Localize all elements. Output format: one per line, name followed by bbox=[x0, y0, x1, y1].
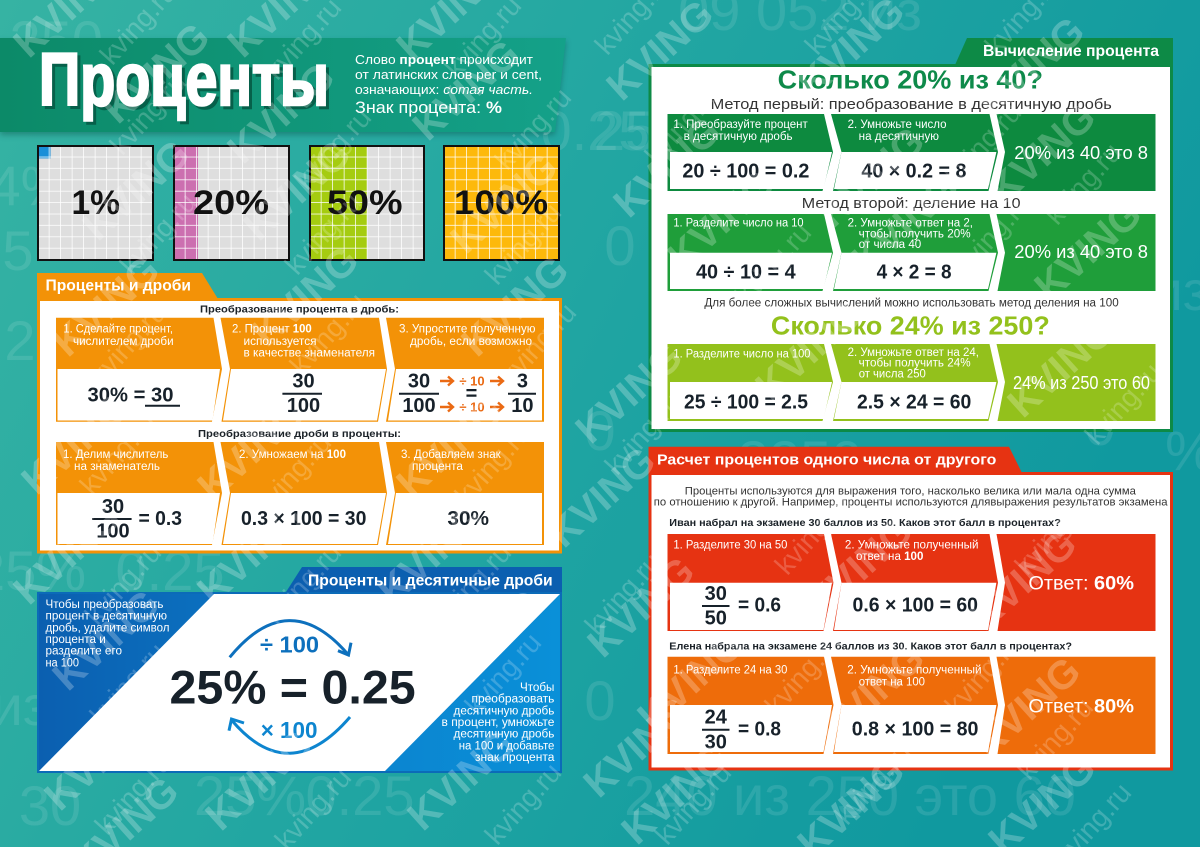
watermark: KVING bbox=[14, 386, 137, 503]
intro text: Проценты используются для выражения того, насколько велика или мала одна сумма bbox=[685, 485, 1137, 497]
problem 1: Иван набрал на экзамене 30 баллов из 50. Каков этот балл в процентах? bbox=[669, 517, 1061, 529]
panel: percent of one number from another bbox=[648, 447, 1172, 769]
step row 1: дробь, если возможно bbox=[410, 336, 532, 348]
problem 2 steps: ответ на 100 bbox=[859, 676, 925, 688]
background numbers: 0.25 bbox=[116, 539, 224, 602]
intro text: по отношению к другой. Например, проценты используются длявыражения результатов экзамена bbox=[654, 496, 1168, 508]
watermark: kving.ru bbox=[459, 627, 547, 720]
intro text bbox=[654, 485, 1168, 508]
question 2 steps: 25 ÷ 100 = 2.5 bbox=[684, 391, 808, 413]
watermark: KVING bbox=[400, 722, 523, 839]
watermark: KVING bbox=[1027, 192, 1150, 309]
step row 1: 30 bbox=[408, 370, 430, 392]
watermark: KVING bbox=[198, 722, 321, 839]
question 2: Сколько 24% из 250? bbox=[771, 310, 1050, 340]
panel: percent and fractions bbox=[37, 273, 560, 552]
intro text bbox=[355, 53, 542, 117]
question 2 steps: чтобы получить 24% bbox=[859, 358, 971, 370]
problem 1 steps: Ответ: 60% bbox=[1028, 573, 1134, 594]
step row 2: на знаменатель bbox=[74, 461, 160, 473]
main equation: 25% = 0.25 bbox=[170, 660, 416, 713]
left explanation: Чтобы преобразовать bbox=[46, 599, 164, 611]
watermark: KVING bbox=[45, 582, 168, 699]
right explanation: в процент, умножьте bbox=[442, 717, 554, 729]
problem 1 steps: = 0.6 bbox=[738, 595, 781, 617]
problem 1 steps: 30 bbox=[705, 583, 727, 605]
right explanation: знак процента bbox=[475, 752, 555, 764]
grid: 100% bbox=[444, 146, 559, 260]
watermark: KVING bbox=[748, 292, 871, 409]
watermark: KVING bbox=[966, 649, 1089, 766]
grid: 1%: 1% bbox=[72, 184, 120, 222]
problem 2 steps: 0.8 × 100 = 80 bbox=[852, 719, 978, 741]
method 1 steps: 40 × 0.2 = 8 bbox=[861, 160, 966, 182]
problem 1 steps: 50 bbox=[705, 607, 727, 629]
subheading: Преобразование процента в дробь: bbox=[200, 304, 399, 316]
background numbers: 0 bbox=[584, 399, 616, 462]
step row 1: 30 bbox=[292, 370, 315, 392]
watermark: KVING bbox=[798, 509, 921, 626]
question 2 steps: 24% из 250 это 60 bbox=[1013, 373, 1150, 393]
step row 1: 2. Процент 100 bbox=[232, 324, 312, 336]
watermark: KVING bbox=[606, 109, 729, 226]
left explanation: на 100 bbox=[46, 657, 79, 669]
watermark: KVING bbox=[95, 15, 218, 132]
question 2 steps: 2. Умножьте ответ на 24, bbox=[848, 347, 979, 359]
step row 1: в качестве знаменателя bbox=[244, 347, 375, 359]
watermark: kving.ru bbox=[939, 97, 1027, 190]
step row 1: 100 bbox=[287, 395, 320, 417]
background numbers: 0 bbox=[1084, 394, 1116, 457]
watermark: KVING bbox=[220, 55, 343, 172]
arrow: divide by 100: ÷ 100 bbox=[260, 632, 319, 658]
watermark: KVING bbox=[45, 248, 168, 365]
watermark: KVING bbox=[970, 9, 1093, 126]
watermark: kving.ru bbox=[769, 487, 857, 580]
watermark: KVING bbox=[810, 119, 933, 236]
watermark: KVING bbox=[37, 702, 160, 819]
title band bbox=[0, 38, 566, 132]
left explanation: процента и bbox=[46, 634, 106, 646]
watermark: KVING bbox=[962, 522, 1085, 639]
step row 1: 1. Сделайте процент, bbox=[63, 324, 173, 336]
watermark: kving.ru bbox=[279, 187, 367, 280]
method 1 steps: на десятичную bbox=[859, 131, 939, 143]
step row 2: 100 bbox=[96, 521, 130, 543]
method 2 steps: 1. Разделите число на 10 bbox=[673, 218, 804, 230]
step row 2: 30 bbox=[102, 496, 124, 518]
watermark: kving.ru bbox=[949, 187, 1037, 280]
step row 2: 2. Умножаем на 100 bbox=[239, 449, 346, 461]
background numbers: 240 из 250 это 60 bbox=[624, 764, 1076, 827]
watermark: kving.ru bbox=[429, 537, 517, 630]
problem 2 steps: = 0.8 bbox=[738, 719, 781, 741]
method 2 steps: 4 × 2 = 8 bbox=[877, 261, 952, 283]
step row 1 bbox=[56, 318, 544, 422]
watermark: kving.ru bbox=[1011, 692, 1099, 785]
arrow: divide by 100 bbox=[230, 621, 351, 658]
problem 2 steps: 30 bbox=[705, 731, 727, 753]
method 2 steps bbox=[668, 214, 1156, 291]
watermark: kving.ru bbox=[84, 297, 172, 390]
watermark: kving.ru bbox=[1009, 487, 1097, 580]
panel heading: Проценты и десятичные дроби bbox=[308, 573, 553, 590]
panel: calculating a percentage bbox=[650, 38, 1173, 430]
problem 1 steps bbox=[668, 534, 1156, 631]
watermark: KVING bbox=[568, 335, 691, 452]
method 1 steps: 20% из 40 это 8 bbox=[1014, 143, 1148, 163]
step row 2: 0.3 × 100 = 30 bbox=[241, 508, 366, 530]
right explanation: на 100 и добавьте bbox=[459, 740, 554, 752]
problem 2 steps: Ответ: 80% bbox=[1028, 697, 1134, 718]
watermark: KVING bbox=[75, 132, 198, 249]
arrow: multiply by 100: × 100 bbox=[261, 717, 318, 743]
background numbers: 0.25 bbox=[540, 99, 650, 162]
step row 1: 100 bbox=[402, 395, 436, 417]
grid: 100%: 100% bbox=[454, 184, 548, 222]
method 1 steps: 2. Умножьте число bbox=[848, 119, 946, 131]
watermark: kving.ru bbox=[1039, 137, 1127, 230]
step row 1: 30% = 30 bbox=[88, 385, 174, 407]
watermark: KVING bbox=[541, 439, 664, 556]
problem 2 steps: 2. Умножьте полученный bbox=[847, 665, 982, 677]
watermark: KVING bbox=[236, 132, 359, 249]
watermark: KVING bbox=[580, 549, 703, 666]
watermark: KVING bbox=[190, 496, 313, 613]
watermark: KVING bbox=[810, 636, 933, 753]
left explanation: разделите его bbox=[46, 646, 122, 658]
watermark: kving.ru bbox=[599, 387, 687, 480]
step row 2: процента bbox=[412, 461, 464, 473]
subheading: Преобразование дроби в проценты: bbox=[198, 428, 401, 440]
watermark: kving.ru bbox=[259, 537, 347, 630]
background numbers: 5 bbox=[2, 219, 34, 282]
panel heading: Расчет процентов одного числа от другого bbox=[657, 452, 997, 468]
background numbers: 2 bbox=[4, 309, 36, 372]
problem 1 steps: 0.6 × 100 = 60 bbox=[852, 595, 978, 617]
right explanation bbox=[442, 682, 555, 764]
problem 2 steps bbox=[668, 657, 1156, 754]
background numbers: 0 bbox=[584, 669, 616, 732]
step row 1: используется bbox=[244, 336, 316, 348]
watermark: kving.ru bbox=[939, 627, 1027, 720]
step row 1: 3 bbox=[517, 370, 528, 392]
method 1 heading: Метод первый: преобразование в десятичную дробь bbox=[711, 96, 1112, 113]
problem 1 steps: 2. Умножьте полученный bbox=[845, 540, 978, 552]
intro text: Слово процент происходит bbox=[355, 53, 533, 67]
watermark: kving.ru bbox=[579, 547, 667, 640]
watermark: KVING bbox=[981, 95, 1104, 212]
watermark: kving.ru bbox=[249, 427, 337, 520]
step row 1: ÷ 10 bbox=[459, 374, 485, 388]
method 1 steps: 1. Преобразуйте процент bbox=[673, 119, 808, 131]
method 2 heading: Метод второй: деление на 10 bbox=[802, 195, 1020, 212]
watermark: KVING bbox=[427, 582, 550, 699]
watermark: kving.ru bbox=[829, 737, 917, 830]
problem 2 steps: 1. Разделите 24 на 30 bbox=[673, 665, 787, 677]
watermark: KVING bbox=[190, 392, 313, 509]
watermark: kving.ru bbox=[494, 297, 582, 390]
left explanation: дробь, удалите символ bbox=[46, 622, 170, 634]
method 2 steps: чтобы получить 20% bbox=[859, 228, 971, 240]
step row 1: 3. Упростите полученную bbox=[399, 324, 536, 336]
watermark: kving.ru bbox=[289, 102, 377, 195]
method 1 steps bbox=[668, 114, 1156, 191]
step row 1: ÷ 10 bbox=[459, 400, 485, 414]
question 2 steps bbox=[668, 344, 1156, 421]
watermark: kving.ru bbox=[449, 417, 537, 510]
watermark: kving.ru bbox=[759, 627, 847, 720]
watermark: KVING bbox=[844, 165, 967, 282]
watermark: kving.ru bbox=[84, 637, 172, 730]
watermark: kving.ru bbox=[284, 287, 372, 380]
problem 1 steps: ответ на 100 bbox=[856, 551, 923, 563]
panel heading: Вычисление процента bbox=[983, 43, 1159, 60]
watermark: KVING bbox=[405, 32, 528, 149]
watermark: KVING bbox=[660, 162, 783, 279]
watermark: kving.ru bbox=[1079, 357, 1167, 450]
grid: 50%: 50% bbox=[327, 184, 403, 222]
watermark: KVING bbox=[576, 689, 699, 806]
note: Для более сложных вычислений можно использовать метод деления на 100 bbox=[704, 298, 1119, 310]
watermark: kving.ru bbox=[104, 67, 192, 160]
step row 2 bbox=[56, 442, 544, 545]
background numbers: 3250 bbox=[738, 429, 862, 492]
watermark: KVING bbox=[443, 145, 566, 262]
right explanation: преобразовать bbox=[472, 694, 554, 706]
grid: 20%: 20% bbox=[193, 184, 269, 222]
method 2 steps: 2. Умножьте ответ на 2, bbox=[848, 218, 973, 230]
arrow: multiply by 100 bbox=[229, 717, 350, 753]
watermark: KVING bbox=[370, 496, 493, 613]
method 2 steps: 40 ÷ 10 = 4 bbox=[696, 261, 796, 283]
left explanation: процент в десятичную bbox=[46, 611, 167, 623]
question 2 steps: 2.5 × 24 = 60 bbox=[857, 391, 971, 413]
right explanation: десятичную дробь bbox=[454, 729, 554, 741]
panel heading: Проценты и дроби bbox=[46, 278, 191, 295]
question 1: Сколько 20% из 40? bbox=[778, 64, 1043, 94]
question 2 steps: 1. Разделите число на 100 bbox=[673, 349, 810, 361]
watermark: kving.ru bbox=[89, 747, 177, 840]
intro text: Знак процента: % bbox=[355, 99, 502, 117]
watermark: kving.ru bbox=[729, 217, 817, 310]
watermark: kving.ru bbox=[479, 197, 567, 290]
panel: percent and decimals bbox=[37, 567, 562, 773]
watermark: KVING bbox=[1000, 309, 1123, 426]
step row 1: числителем дроби bbox=[73, 336, 174, 348]
watermark: KVING bbox=[389, 389, 512, 506]
background numbers: 0 bbox=[604, 214, 636, 277]
watermark: kving.ru bbox=[74, 407, 162, 500]
watermark: KVING bbox=[244, 238, 367, 355]
watermark: kving.ru bbox=[79, 537, 167, 630]
method 2 steps: 20% из 40 это 8 bbox=[1014, 242, 1148, 262]
watermark: KVING bbox=[630, 622, 753, 739]
step row 2: 30% bbox=[447, 508, 489, 530]
watermark: KVING bbox=[6, 496, 129, 613]
watermark: KVING bbox=[454, 248, 577, 365]
title: Проценты bbox=[39, 38, 329, 121]
background numbers: 25% bbox=[194, 764, 306, 827]
step row 2: 3. Добавляем знак bbox=[401, 449, 502, 461]
right explanation: десятичную дробь bbox=[454, 705, 554, 717]
question 2 steps: от числа 250 bbox=[859, 368, 926, 380]
watermark: kving.ru bbox=[489, 82, 577, 175]
grid: 50% bbox=[310, 146, 424, 260]
step row 1: 10 bbox=[511, 395, 534, 417]
background numbers: 30 bbox=[19, 774, 81, 837]
problem 1 steps: 1. Разделите 30 на 50 bbox=[673, 540, 787, 552]
watermark: kving.ru bbox=[639, 77, 727, 170]
right explanation: Чтобы bbox=[520, 682, 554, 694]
grid: 20% bbox=[174, 146, 289, 260]
step row 1: = bbox=[466, 383, 477, 405]
problem 2: Елена набрала на экзамене 24 баллов из 30. Каков этот балл в процентах? bbox=[669, 640, 1072, 652]
grid: 1% bbox=[38, 146, 153, 260]
step row 2: 1. Делим числитель bbox=[63, 449, 168, 461]
background numbers: 0.25 bbox=[306, 764, 414, 827]
method 1 steps: в десятичную дробь bbox=[684, 131, 793, 143]
step row 2: = 0.3 bbox=[138, 508, 182, 530]
problem 2 steps: 24 bbox=[705, 706, 728, 728]
method 1 steps: 20 ÷ 100 = 0.2 bbox=[682, 160, 809, 182]
background numbers: 25 bbox=[594, 99, 656, 162]
intro text: от латинских слов per и cent, bbox=[355, 68, 542, 82]
intro text: означающих: сотая часть. bbox=[355, 83, 533, 97]
watermark: kving.ru bbox=[114, 187, 202, 280]
method 2 steps: от числа 40 bbox=[859, 239, 921, 251]
left explanation bbox=[46, 599, 170, 669]
